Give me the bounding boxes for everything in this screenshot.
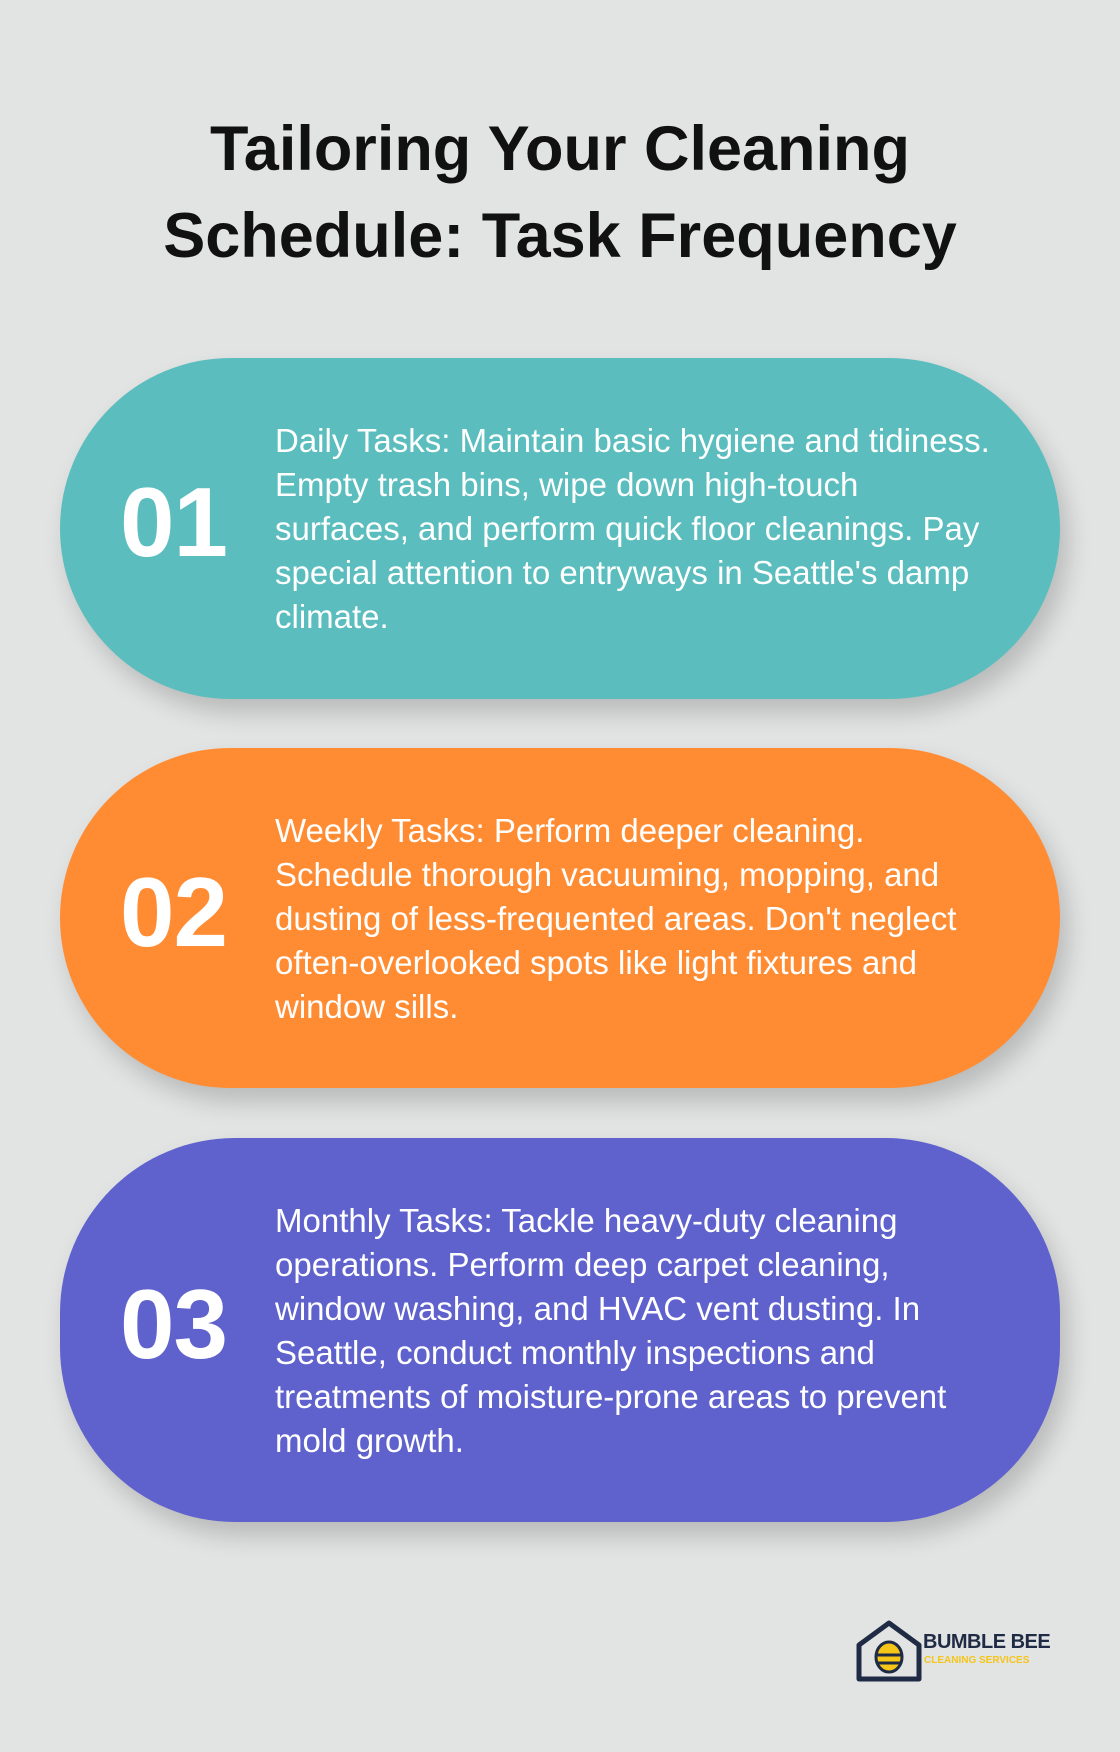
text: daily [275, 422, 990, 635]
title: Schedule: Task Frequency [163, 201, 957, 271]
logo text: BUMBLE BEE [923, 1631, 1050, 1653]
panel: monthly tasks [60, 1138, 1060, 1522]
number 03: 03 [120, 1269, 227, 1379]
text: weekly: Schedule thorough vacuuming, mopping, and [275, 856, 939, 893]
text: monthly: operations. Perform deep carpet cleaning, [275, 1246, 890, 1283]
title [163, 114, 957, 271]
text: monthly: window washing, and HVAC vent dusting. In [275, 1290, 920, 1327]
text: monthly: treatments of moisture-prone areas to prevent [275, 1378, 946, 1415]
text: monthly: mold growth. [275, 1422, 464, 1459]
text: daily: special attention to entryways in Seattle's damp [275, 554, 969, 591]
text: weekly: often-overlooked spots like light fixtures and [275, 944, 917, 981]
text: weekly [275, 812, 956, 1025]
panel: daily tasks [60, 358, 1060, 699]
text: monthly [275, 1202, 946, 1459]
text: weekly: window sills. [275, 988, 458, 1025]
text: daily: climate. [275, 598, 389, 635]
title: Tailoring Your Cleaning [210, 114, 910, 184]
text: daily: Daily Tasks: Maintain basic hygiene and tidiness. [275, 422, 990, 459]
icon: bee house [856, 1620, 922, 1682]
number 02: 02 [120, 857, 227, 967]
text: monthly: Monthly Tasks: Tackle heavy-duty cleaning [275, 1202, 897, 1239]
logo: CLEANING SERVICES [924, 1655, 1029, 1666]
text: weekly: Weekly Tasks: Perform deeper cleaning. [275, 812, 864, 849]
text: daily: surfaces, and perform quick floor cleanings. Pay [275, 510, 979, 547]
text: monthly: Seattle, conduct monthly inspections and [275, 1334, 875, 1371]
logo [856, 1620, 1050, 1682]
text: daily: Empty trash bins, wipe down high-touch [275, 466, 858, 503]
panel: weekly tasks [60, 748, 1060, 1088]
number 01: 01 [120, 467, 227, 577]
text: weekly: dusting of less-frequented areas. Don't neglect [275, 900, 956, 937]
